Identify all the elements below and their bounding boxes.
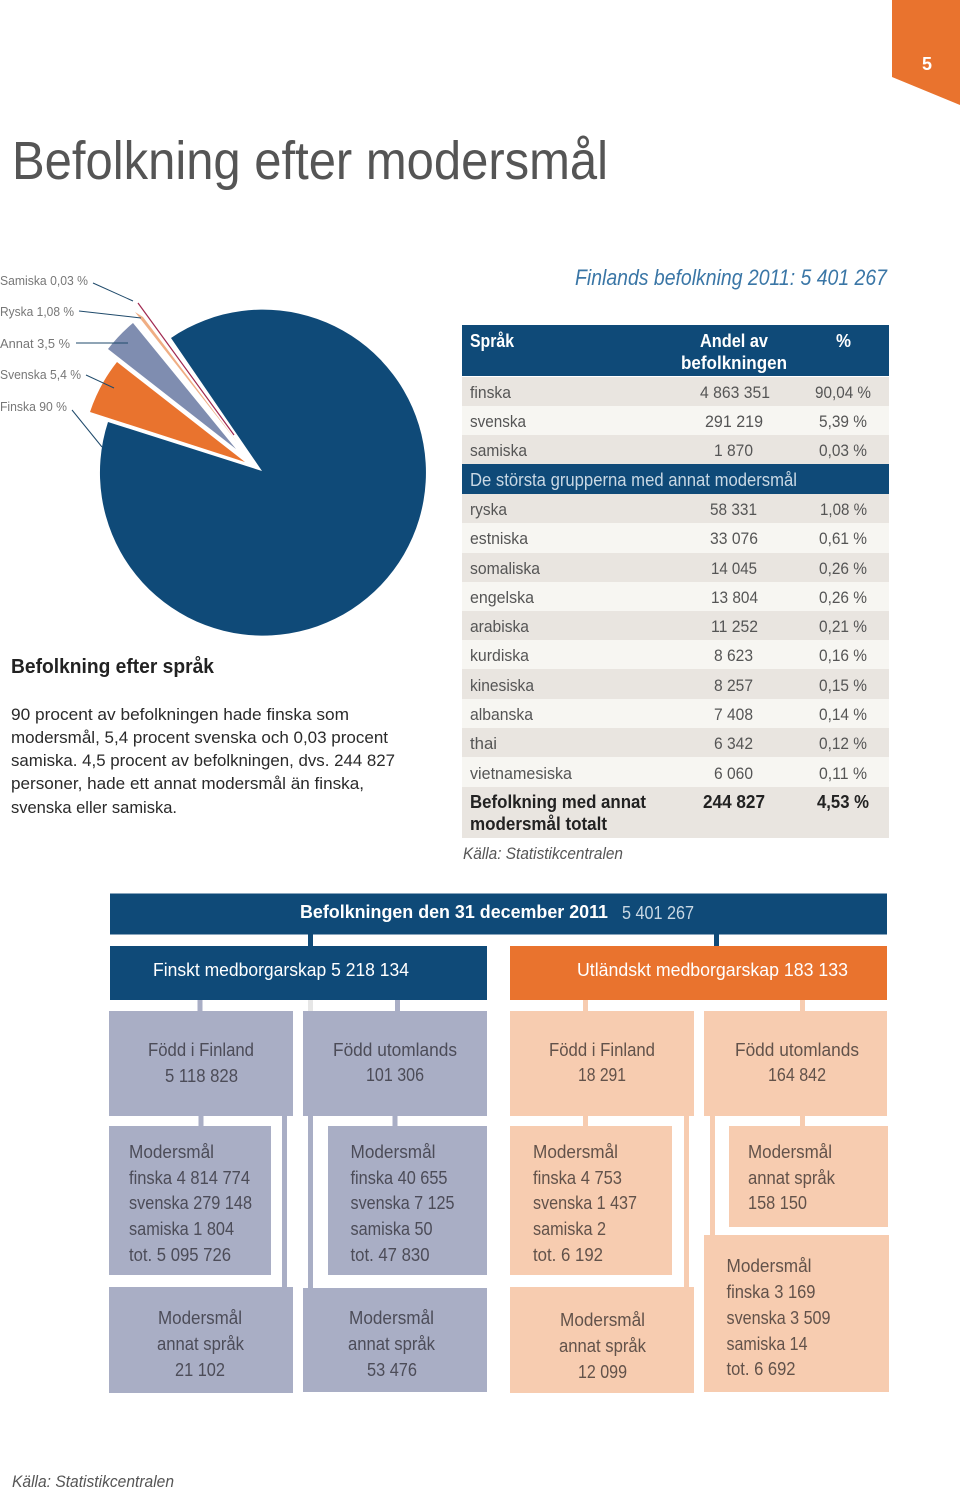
paragraph bbox=[11, 705, 395, 817]
table text: languages: finska bbox=[470, 383, 511, 402]
flowchart: finnish citizenship bbox=[110, 946, 487, 1000]
table text: percentages: 0,15 % bbox=[819, 676, 867, 695]
table text: languages: kurdiska bbox=[470, 646, 529, 665]
paragraph: 90 procent av befolkningen hade finska som bbox=[11, 705, 349, 724]
table text: counts: 7 408 bbox=[714, 705, 753, 724]
paragraph: svenska eller samiska. bbox=[11, 798, 177, 817]
flowchart: foreign citizenship: Utländskt medborgarskap 183 133 bbox=[577, 960, 848, 980]
flowchart: foreign citizenship bbox=[510, 946, 887, 1000]
table text: counts: 291 219 bbox=[705, 412, 763, 431]
box: finnish citizens born abroad: Född utomlands bbox=[333, 1040, 457, 1060]
table text: counts: 58 331 bbox=[710, 500, 757, 519]
box: mother tongue, finnish citizens born abroad: Modersmål bbox=[350, 1142, 436, 1162]
box: other language, foreign citizens born abroad bbox=[729, 1126, 888, 1227]
table text: percentages: 0,14 % bbox=[819, 705, 867, 724]
table text: languages: thai bbox=[470, 734, 497, 753]
table text: languages: samiska bbox=[470, 441, 527, 460]
slice: ryska bbox=[135, 312, 237, 442]
table source: Källa: Statistikcentralen bbox=[463, 844, 623, 863]
box: mother tongue, foreign citizens born abroad: Modersmål bbox=[726, 1256, 812, 1276]
table text: percentages: 90,04 % bbox=[815, 383, 871, 402]
table text: percentages: 0,12 % bbox=[819, 734, 867, 753]
table text: languages bbox=[470, 383, 573, 783]
box: mother tongue, finnish citizens born in Finland: samiska 1 804 bbox=[129, 1219, 234, 1239]
page source: Källa: Statistikcentralen bbox=[12, 1472, 174, 1491]
page number tab bbox=[892, 0, 960, 105]
slice: annat bbox=[108, 323, 236, 449]
pie chart bbox=[0, 273, 426, 636]
paragraph: personer, hade ett annat modersmål än finska, bbox=[11, 774, 364, 793]
table subheading bbox=[462, 464, 889, 494]
box: other language, foreign citizens born in Finland bbox=[510, 1287, 694, 1393]
table text: counts: 8 257 bbox=[714, 676, 753, 695]
box: mother tongue, foreign citizens born abroad: finska 3 169 bbox=[726, 1282, 816, 1302]
table header bbox=[462, 325, 889, 376]
table header: Andel av bbox=[700, 331, 768, 351]
pie labels: Samiska 0,03 % bbox=[0, 273, 88, 288]
table text: percentages: 1,08 % bbox=[820, 500, 867, 519]
table text: percentages: 0,03 % bbox=[819, 441, 867, 460]
box: mother tongue, foreign citizens born abroad: tot. 6 692 bbox=[726, 1359, 796, 1379]
table text: counts: 14 045 bbox=[711, 559, 757, 578]
page number tab: 5 bbox=[922, 54, 932, 74]
pie leader lines bbox=[72, 283, 141, 447]
box: mother tongue, foreign citizens born in Finland bbox=[510, 1126, 672, 1275]
flowchart: finnish citizenship: Finskt medborgarskap 5 218 134 bbox=[153, 960, 409, 980]
box: mother tongue, foreign citizens born in Finland: svenska 1 437 bbox=[533, 1193, 637, 1213]
box: mother tongue, finnish citizens born abroad: finska 40 655 bbox=[350, 1168, 448, 1188]
table text: counts: 13 804 bbox=[711, 588, 758, 607]
table text: languages: kinesiska bbox=[470, 676, 534, 695]
box: foreign citizens born in Finland: 18 291 bbox=[578, 1065, 626, 1085]
table rows background bbox=[462, 377, 889, 838]
box: foreign citizens born abroad: 164 842 bbox=[768, 1065, 826, 1085]
table text: percentages: 0,26 % bbox=[819, 559, 867, 578]
box: finnish citizens born in Finland bbox=[109, 1011, 293, 1116]
box: mother tongue, finnish citizens born abroad: tot. 47 830 bbox=[350, 1245, 430, 1265]
table text: counts: 8 623 bbox=[714, 646, 753, 665]
box: other language, finnish citizens born abroad: 53 476 bbox=[367, 1360, 417, 1380]
box: mother tongue, foreign citizens born abroad: svenska 3 509 bbox=[726, 1308, 830, 1328]
table header: befolkningen bbox=[681, 353, 787, 373]
box: mother tongue, finnish citizens born in Finland bbox=[109, 1126, 271, 1275]
box: other language, finnish citizens born abroad: Modersmål bbox=[349, 1308, 434, 1328]
box: other language, foreign citizens born abroad: 158 150 bbox=[748, 1193, 807, 1213]
table text: counts: 33 076 bbox=[710, 529, 758, 548]
paragraph: samiska. 4,5 procent av befolkningen, dvs. 244 827 bbox=[11, 751, 395, 770]
box: other language, finnish citizens born in Finland bbox=[109, 1287, 293, 1393]
box: finnish citizens born in Finland: 5 118 828 bbox=[165, 1066, 238, 1086]
table total row bbox=[470, 792, 869, 834]
table text: languages: arabiska bbox=[470, 617, 529, 636]
box: other language, foreign citizens born abroad: annat språk bbox=[748, 1168, 836, 1188]
box: other language, foreign citizens born in Finland: 12 099 bbox=[578, 1362, 627, 1382]
box: finnish citizens born in Finland: Född i Finland bbox=[148, 1040, 254, 1060]
table text: percentages bbox=[815, 383, 871, 783]
table text: counts: 6 060 bbox=[714, 764, 753, 783]
box: mother tongue, foreign citizens born abroad bbox=[704, 1235, 889, 1392]
box: foreign citizens born abroad: Född utomlands bbox=[735, 1040, 859, 1060]
pie labels: Finska 90 % bbox=[0, 399, 67, 414]
pie labels: Svenska 5,4 % bbox=[0, 367, 81, 382]
box: mother tongue, foreign citizens born in Finland: Modersmål bbox=[533, 1142, 618, 1162]
table text: percentages: 5,39 % bbox=[819, 412, 867, 431]
box: foreign citizens born abroad bbox=[704, 1011, 887, 1116]
flowchart connectors bbox=[198, 934, 805, 1288]
box: foreign citizens born in Finland: Född i Finland bbox=[549, 1040, 655, 1060]
box: mother tongue, finnish citizens born in Finland: svenska 279 148 bbox=[129, 1193, 252, 1213]
box: mother tongue, finnish citizens born in Finland: finska 4 814 774 bbox=[129, 1168, 250, 1188]
heading: Befolkning efter språk bbox=[11, 655, 215, 678]
table text: counts: 11 252 bbox=[711, 617, 758, 636]
table text: languages: ryska bbox=[470, 500, 507, 519]
slice: samiska bbox=[138, 303, 234, 435]
box: mother tongue, foreign citizens born abroad: samiska 14 bbox=[726, 1334, 808, 1354]
pie labels: Ryska 1,08 % bbox=[0, 304, 74, 319]
table text: counts: 6 342 bbox=[714, 734, 753, 753]
table title: Finlands befolkning 2011: 5 401 267 bbox=[575, 265, 888, 290]
table header: Språk bbox=[470, 331, 515, 351]
table text: counts: 4 863 351 bbox=[700, 383, 770, 402]
box: mother tongue, finnish citizens born abroad bbox=[328, 1126, 487, 1275]
table text: counts: 1 870 bbox=[714, 441, 753, 460]
flowchart: total population: 5 401 267 bbox=[622, 903, 694, 923]
table text: languages: svenska bbox=[470, 412, 526, 431]
pie labels: Annat 3,5 % bbox=[0, 336, 70, 351]
box: mother tongue, foreign citizens born in Finland: tot. 6 192 bbox=[533, 1245, 603, 1265]
box: other language, finnish citizens born in Finland: 21 102 bbox=[175, 1360, 225, 1380]
box: other language, foreign citizens born in Finland: Modersmål bbox=[560, 1310, 645, 1330]
table total row: 4,53 % bbox=[817, 792, 869, 812]
table text: counts bbox=[700, 383, 770, 783]
flowchart: total population: Befolkningen den 31 december 2011 bbox=[300, 902, 608, 922]
box: other language, foreign citizens born abroad: Modersmål bbox=[748, 1142, 832, 1162]
box: mother tongue, finnish citizens born in Finland: Modersmål bbox=[129, 1142, 214, 1162]
table text: languages: engelska bbox=[470, 588, 535, 607]
box: mother tongue, finnish citizens born abroad: svenska 7 125 bbox=[350, 1193, 454, 1213]
slice: svenska bbox=[90, 362, 245, 462]
box: other language, finnish citizens born in Finland: Modersmål bbox=[158, 1308, 242, 1328]
title: Befolkning efter modersmål bbox=[12, 131, 608, 191]
table: språk bbox=[462, 325, 889, 838]
box: finnish citizens born abroad: 101 306 bbox=[366, 1065, 424, 1085]
table text: languages: vietnamesiska bbox=[470, 764, 573, 783]
box: other language, finnish citizens born abroad: annat språk bbox=[348, 1334, 436, 1354]
box: other language, finnish citizens born in Finland: annat språk bbox=[157, 1334, 245, 1354]
table total row: 244 827 bbox=[703, 792, 765, 812]
table text: languages: estniska bbox=[470, 529, 528, 548]
box: mother tongue, finnish citizens born abroad: samiska 50 bbox=[350, 1219, 432, 1239]
table total row: Befolkning med annat bbox=[470, 792, 646, 812]
paragraph: modersmål, 5,4 procent svenska och 0,03 procent bbox=[11, 728, 388, 747]
table text: languages: albanska bbox=[470, 705, 533, 724]
text block: befolkning efter språk bbox=[11, 655, 395, 817]
box: mother tongue, foreign citizens born in Finland: samiska 2 bbox=[533, 1219, 606, 1239]
box: other language, foreign citizens born in Finland: annat språk bbox=[559, 1336, 647, 1356]
table header: % bbox=[836, 331, 851, 351]
table text: percentages: 0,26 % bbox=[819, 588, 867, 607]
flowchart: total population bbox=[110, 894, 887, 934]
table text: percentages: 0,61 % bbox=[819, 529, 867, 548]
table text: percentages: 0,21 % bbox=[819, 617, 867, 636]
slice: finska bbox=[100, 310, 426, 636]
pie labels bbox=[0, 273, 88, 414]
table text: languages: somaliska bbox=[470, 559, 540, 578]
box: foreign citizens born in Finland bbox=[510, 1011, 694, 1116]
box: other language, finnish citizens born abroad bbox=[303, 1288, 487, 1392]
table text: percentages: 0,16 % bbox=[819, 646, 867, 665]
table text: percentages: 0,11 % bbox=[819, 764, 867, 783]
box: mother tongue, foreign citizens born in Finland: finska 4 753 bbox=[533, 1168, 622, 1188]
box: finnish citizens born abroad bbox=[303, 1011, 487, 1116]
table total row: modersmål totalt bbox=[470, 814, 607, 834]
table subheading: De största grupperna med annat modersmål bbox=[470, 470, 797, 490]
box: mother tongue, finnish citizens born in Finland: tot. 5 095 726 bbox=[129, 1245, 231, 1265]
